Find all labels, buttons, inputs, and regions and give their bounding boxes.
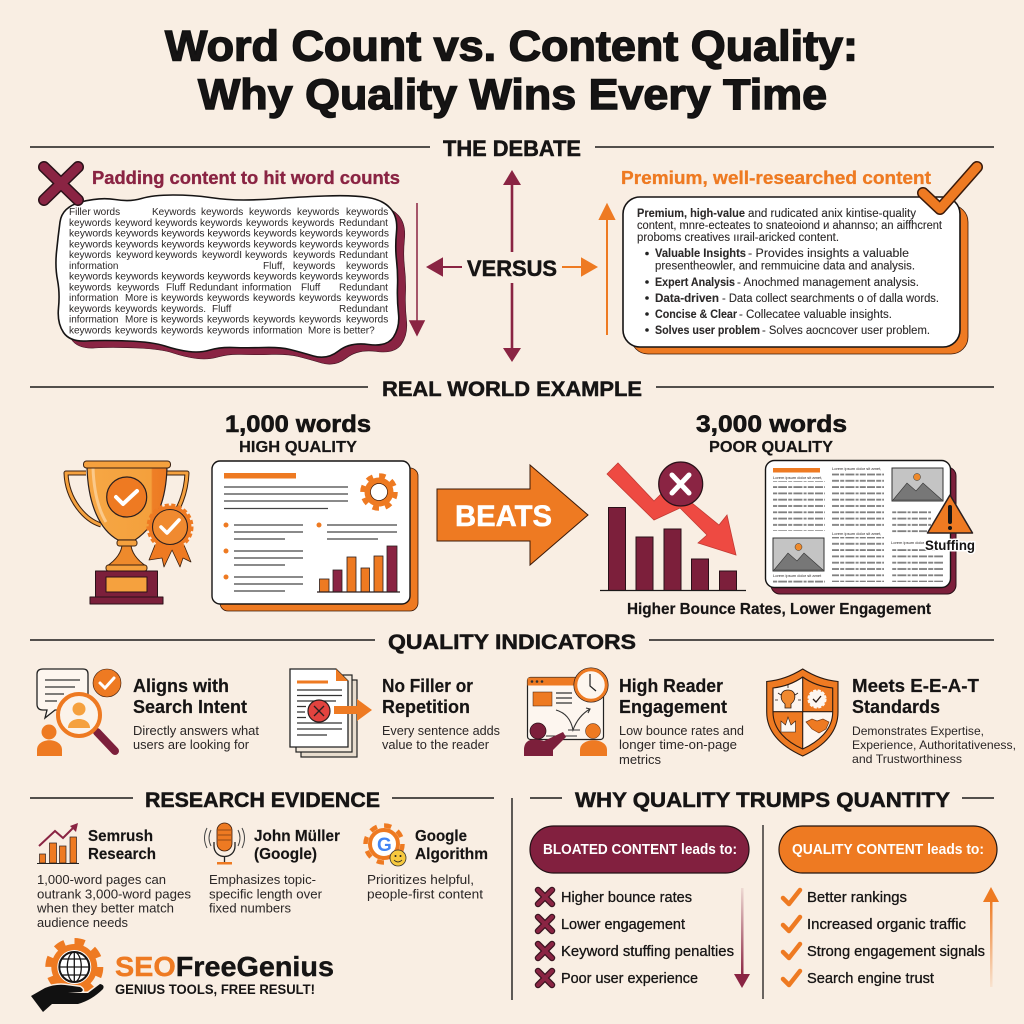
lorem columns: Lorem ipsum dolor sit amet, <box>832 531 881 536</box>
title: Why Quality Wins Every Time <box>198 71 827 119</box>
card text: - Data collect searchments o of dalla words. <box>722 293 939 305</box>
heading: research evidence: RESEARCH EVIDENCE <box>145 789 380 812</box>
panel: padding content <box>44 167 424 364</box>
filler text block: keywords <box>299 293 341 304</box>
versus arrows <box>428 170 596 362</box>
lorem columns: Lorem ipsum dolor sit amet <box>773 573 822 578</box>
icon: google gear and smiley: G <box>377 835 392 856</box>
filler text block: keywords <box>161 315 203 326</box>
research text: outrank 3,000-word pages <box>37 888 191 902</box>
icon: microphone <box>204 823 244 864</box>
research text: Algorithm <box>415 846 488 863</box>
filler text block: keywords <box>346 293 388 304</box>
filler text block <box>69 207 389 336</box>
research text: Research <box>88 846 156 863</box>
research text: 1,000-word pages can <box>37 873 166 887</box>
card text: - Provides insights a valuable <box>748 248 909 260</box>
arrow: up <box>600 205 614 335</box>
indicator text: Aligns with <box>133 675 229 696</box>
card text: Expert Analysis <box>655 277 735 289</box>
icon: documents with arrow <box>290 669 372 757</box>
indicator text: Standards <box>852 696 940 717</box>
title <box>165 22 858 119</box>
heading: the debate: THE DEBATE <box>443 136 581 161</box>
label: 3,000 words: 3,000 words <box>696 411 847 438</box>
icon: gear, globe and hand <box>31 942 104 1012</box>
research text <box>367 828 488 902</box>
caption: bounce rates: Higher Bounce Rates, Lower Engagement <box>627 601 932 618</box>
research: semrush <box>36 823 191 930</box>
pill heading: QUALITY CONTENT leads to: <box>792 842 984 858</box>
indicator text: Meets E-E-A-T <box>852 675 980 696</box>
arrow: up <box>983 887 999 987</box>
filler text block: Fluff <box>301 282 320 293</box>
filler text block: keywords <box>69 326 111 336</box>
filler text block: keywords <box>245 250 287 261</box>
icon: warning triangle <box>928 495 972 533</box>
panel heading: Premium, well-researched content <box>621 167 931 188</box>
filler text block: keyword <box>115 218 152 229</box>
heading: real world example: REAL WORLD EXAMPLE <box>382 378 642 401</box>
indicator text: Demonstrates Expertise, <box>852 724 984 738</box>
filler text block: information <box>69 315 118 326</box>
filler text block: keywords <box>155 218 197 229</box>
label: 3,000 words <box>696 411 847 456</box>
pill heading <box>530 826 749 873</box>
card text: - Collecatee valuable insights. <box>739 309 892 321</box>
filler text block: keywords <box>155 250 197 261</box>
indicator text: High Reader <box>619 675 723 696</box>
icon: growth chart <box>37 823 79 864</box>
pill heading: BLOATED CONTENT leads to: <box>543 842 737 858</box>
card text <box>637 208 943 337</box>
card text: Valuable Insights <box>655 248 746 260</box>
filler text block: keywords <box>201 207 243 218</box>
label: stuffing: Stuffing <box>925 537 975 553</box>
filler text block: keywords <box>207 293 249 304</box>
icon: browser, clock and people <box>524 668 608 756</box>
filler text block: Redundant <box>189 282 238 293</box>
filler text block: keywords <box>346 207 388 218</box>
research text: people-first content <box>367 888 484 902</box>
filler text block: Fluff, <box>263 261 285 272</box>
indicator: search intent <box>37 669 260 756</box>
indicator text: Directly answers what <box>133 724 260 738</box>
versus label: VERSUS <box>467 256 557 281</box>
pill heading <box>779 826 997 873</box>
filler text block: keywords <box>207 315 249 326</box>
panel: quality content <box>779 826 999 987</box>
filler text block: keyword <box>116 250 153 261</box>
filler text block: information <box>69 261 118 272</box>
research: john mueller <box>204 823 340 916</box>
bloated text cloud <box>56 195 407 364</box>
research text: specific length over <box>209 888 322 902</box>
indicator text <box>852 675 1016 766</box>
card text: content, mnre-ecteates to snateoiond ᴎ ahannso; an aiffhcrent <box>637 220 943 232</box>
lorem columns: Lorem ipsum dolor sit <box>891 540 930 545</box>
card: poor quality document <box>766 460 975 594</box>
icon: check mark <box>923 167 977 209</box>
filler text block: Fluff <box>212 304 231 315</box>
research text <box>36 828 191 930</box>
research text: John Müller <box>254 828 340 845</box>
brand name: SEOFreeGenius <box>115 951 334 982</box>
image placeholder 1 <box>773 538 824 571</box>
heading: quality indicators: QUALITY INDICATORS <box>388 631 636 654</box>
filler text block: keywords keywords keywords keywords keywords keywords keywords <box>69 272 389 283</box>
content card <box>623 197 968 354</box>
filler text block: keywords <box>299 315 341 326</box>
filler text block: More is <box>125 315 158 326</box>
indicator text: metrics <box>619 753 661 767</box>
indicator text: Engagement <box>619 696 727 717</box>
card text: Premium, high-value <box>637 208 745 220</box>
panel: premium content <box>600 167 977 354</box>
filler text block: keywords <box>297 207 339 218</box>
bad outcomes list: Lower engagement <box>561 917 685 933</box>
bad outcomes list: Keyword stuffing penalties <box>561 944 734 960</box>
icon: handshake <box>806 719 829 733</box>
filler text block: Filler words <box>69 207 120 218</box>
filler text block: keywords. <box>161 304 206 315</box>
indicator text <box>619 675 744 767</box>
indicator text <box>133 675 260 752</box>
filler text block: information <box>253 326 302 336</box>
filler text block: Fluff <box>166 282 185 293</box>
lorem columns: Lorem ipsum dolor sit amet, <box>832 466 881 471</box>
research text: audience needs <box>37 916 128 930</box>
indicator: no filler <box>290 669 500 757</box>
filler text block: keywords <box>249 207 291 218</box>
icon: x circle <box>659 462 703 506</box>
card: high quality document <box>212 461 418 611</box>
indicator text: Search Intent <box>133 696 247 717</box>
indicator: engagement <box>524 668 744 767</box>
arrow: down <box>734 888 750 988</box>
icon: gear <box>363 476 395 508</box>
indicator text: Every sentence adds <box>382 724 500 738</box>
filler text block: information <box>69 293 118 304</box>
bad outcomes list: Higher bounce rates <box>561 890 692 906</box>
filler text block: keywords <box>253 293 295 304</box>
good outcomes list: Strong engagement signals <box>807 944 985 960</box>
icon: shield <box>767 669 838 756</box>
filler text block: keywords <box>293 250 335 261</box>
filler text block: keywords <box>161 293 203 304</box>
chart: falling bars <box>600 462 746 590</box>
filler text block: keywords <box>346 315 388 326</box>
research text: Prioritizes helpful, <box>367 873 474 887</box>
filler text block: More is <box>125 293 158 304</box>
label: 3,000 words: POOR QUALITY <box>709 439 833 456</box>
research: google algorithm <box>366 826 488 902</box>
filler text block: keywords <box>69 282 111 293</box>
arrow: down <box>410 203 424 335</box>
icon: crown <box>781 717 796 732</box>
good outcomes list: Increased organic traffic <box>807 917 966 933</box>
indicator text: and Trustworthiness <box>852 752 962 766</box>
indicator text: value to the reader <box>382 738 489 752</box>
card text: presentheowler, and remmuicine data and analysis. <box>655 260 915 272</box>
indicator text: Repetition <box>382 696 470 717</box>
card text: Concise & Clear <box>655 309 737 321</box>
filler text block: keywords <box>200 218 242 229</box>
indicator text: longer time-on-page <box>619 738 737 752</box>
lorem columns <box>773 466 943 585</box>
filler text block: keywords <box>207 326 249 336</box>
good outcomes list: Better rankings <box>807 890 907 906</box>
heading: why quality trumps quantity: WHY QUALITY TRUMPS QUANTITY <box>575 789 950 812</box>
lorem columns: Lorem ipsum dolor sit amet, <box>773 475 822 480</box>
filler text block: keywords <box>161 326 203 336</box>
indicator text: Low bounce rates and <box>619 724 744 738</box>
panel heading: Padding content to hit word counts <box>92 167 400 188</box>
arrow: red decline <box>607 463 736 555</box>
icon: magnifier and user <box>37 669 121 756</box>
filler text block: keywords <box>346 261 388 272</box>
logo: seofreegenius <box>31 942 334 1012</box>
label: 1,000 words: HIGH QUALITY <box>239 439 357 456</box>
tagline: GENIUS TOOLS, FREE RESULT! <box>115 981 315 997</box>
bad outcomes list <box>538 890 734 987</box>
indicator text: users are looking for <box>133 738 249 752</box>
arrow: beats <box>437 465 588 565</box>
filler text block: keywords keywords keywords keywords keywords keywords keywords <box>69 228 389 240</box>
filler text block: Keywords <box>152 207 196 218</box>
filler text block: keywords <box>69 218 111 229</box>
filler text block: keywords <box>69 250 111 261</box>
icon: trophy with badge <box>66 461 192 604</box>
filler text block: keywords <box>293 261 335 272</box>
indicator text: Experience, Authoritativeness, <box>852 738 1016 752</box>
bar chart <box>317 546 400 592</box>
card text: and rudicated anix kintise-quality <box>748 208 916 220</box>
arrow: beats: BEATS <box>455 500 552 533</box>
filler text block: keywordI <box>202 250 242 261</box>
filler text block: Redundant <box>339 250 388 261</box>
research text: Emphasizes topic- <box>209 873 316 887</box>
icon: red x <box>44 167 78 200</box>
filler text block: More is better? <box>308 326 375 336</box>
indicator text: No Filler or <box>382 675 473 696</box>
label: 1,000 words: 1,000 words <box>225 411 371 438</box>
filler text block: Redundant <box>339 304 388 315</box>
filler text block: keywords <box>292 218 334 229</box>
card text: proboms creatives ıırail-aricked content. <box>637 232 839 244</box>
research text: when they better match <box>36 902 174 916</box>
filler text block: keywords <box>115 304 157 315</box>
card text: Data-driven <box>655 293 719 305</box>
research text: (Google) <box>254 846 317 863</box>
title: Word Count vs. Content Quality: <box>165 22 858 70</box>
filler text block: keywords <box>253 315 295 326</box>
filler text block: keywords <box>69 304 111 315</box>
icon: badge <box>808 690 826 708</box>
indicator: e-e-a-t <box>767 669 1016 766</box>
card text: - Solves aocncover user problem. <box>762 325 930 337</box>
filler text block: Redundant <box>339 218 388 229</box>
good outcomes list: Search engine trust <box>807 971 934 987</box>
indicator text <box>382 675 500 752</box>
icon: bulb <box>775 685 801 708</box>
research text: Semrush <box>88 828 153 845</box>
research text <box>209 828 340 916</box>
filler text block: Redundant <box>339 282 388 293</box>
panel: bloated content <box>530 826 750 988</box>
card text: - Anochmed management analysis. <box>737 277 919 289</box>
image placeholder 2 <box>892 468 943 501</box>
card text: Solves user problem <box>655 325 760 337</box>
label: 1,000 words <box>225 411 371 456</box>
filler text block: information <box>242 282 291 293</box>
filler text block: keywords <box>115 326 157 336</box>
good outcomes list <box>783 890 985 987</box>
research text: fixed numbers <box>209 902 291 916</box>
filler text block: keywords <box>117 282 159 293</box>
research text: Google <box>415 828 467 845</box>
filler text block: keywords keywords keywords keywords keywords keywords keywords <box>69 239 389 250</box>
bad outcomes list: Poor user experience <box>561 971 698 987</box>
filler text block: keywords <box>246 218 288 229</box>
